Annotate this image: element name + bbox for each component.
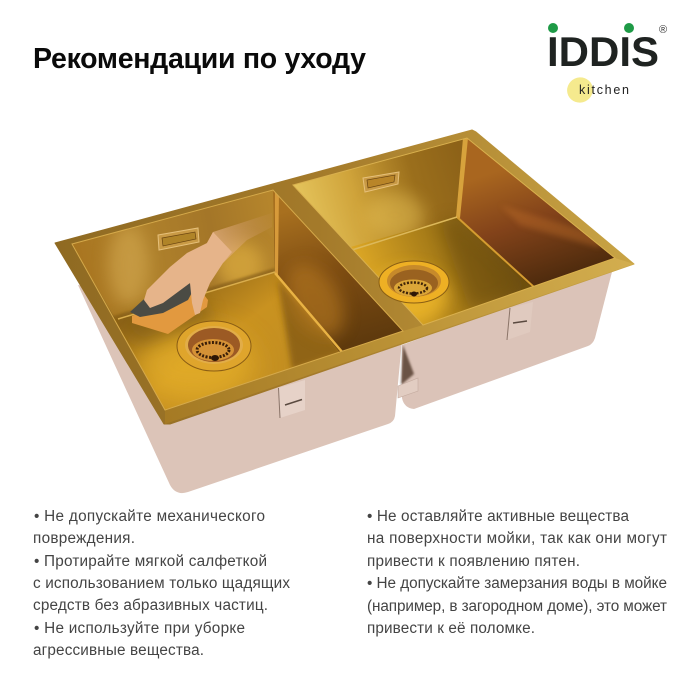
text: right column: (например, в загородном доме), это может (367, 598, 667, 615)
left basin (72, 190, 410, 412)
text: right column: привести к появлению пятен. (367, 553, 580, 570)
title: Рекомендации по уходу (33, 43, 366, 75)
logo dot right (624, 23, 634, 33)
left basin inner rim line (72, 190, 403, 410)
logo subtitle: kitchen (579, 83, 629, 97)
text: right column: • Не допускайте замерзания воды в мойке (367, 575, 667, 592)
text: left column: • Протирайте мягкой салфеткой (34, 553, 267, 570)
overflow right (363, 172, 399, 192)
sponge dark top (130, 283, 197, 317)
logo wordmark: IDDIS (547, 28, 659, 75)
floor left basin (117, 273, 301, 410)
sponge orange base (132, 286, 208, 334)
clip: left (278, 380, 305, 418)
logo dot left (548, 23, 558, 33)
text: left column: • Не допускайте механического (34, 508, 265, 525)
sponge (130, 283, 208, 334)
text: right column (367, 508, 667, 637)
text: left column: средств без абразивных частиц. (33, 597, 268, 614)
floor shadow band (278, 280, 345, 370)
wall crease highlight (275, 273, 343, 353)
forearm (207, 213, 272, 263)
back wall left basin (72, 190, 275, 320)
mounting strap (398, 378, 418, 398)
logo: IDDIS kitchen (547, 23, 667, 107)
right basin (293, 138, 620, 330)
text: left column (33, 508, 290, 659)
text: right column: • Не оставляйте активные вещества (367, 508, 629, 525)
right wall left basin (273, 190, 410, 356)
sink body: left (78, 285, 402, 493)
text: left column: • Не используйте при уборке (34, 620, 245, 637)
hand (144, 213, 272, 315)
text: left column: агрессивные вещества. (33, 642, 204, 659)
text: right column: привести к её поломке. (367, 620, 535, 637)
sink illustration (55, 130, 634, 493)
text: right column: на поверхности мойки, так как они могут (367, 530, 667, 547)
rim (55, 130, 634, 424)
sink body: right (402, 268, 613, 409)
icon: yellow blob (563, 73, 597, 107)
floor right basin (351, 218, 532, 324)
text: left column: с использованием только щадящих (33, 575, 290, 592)
clip: right (507, 302, 533, 340)
gap shadow between basins (401, 345, 414, 385)
rim front edge (165, 258, 634, 424)
registered mark: ® (659, 24, 667, 36)
palm and fingers (144, 232, 232, 315)
drain right (379, 261, 449, 303)
drain left (177, 321, 251, 371)
text: left column: повреждения. (33, 530, 135, 547)
back wall right basin (293, 138, 467, 250)
right wall right basin (457, 138, 620, 290)
overflow left (158, 228, 199, 250)
right basin inner rim line (293, 138, 615, 325)
